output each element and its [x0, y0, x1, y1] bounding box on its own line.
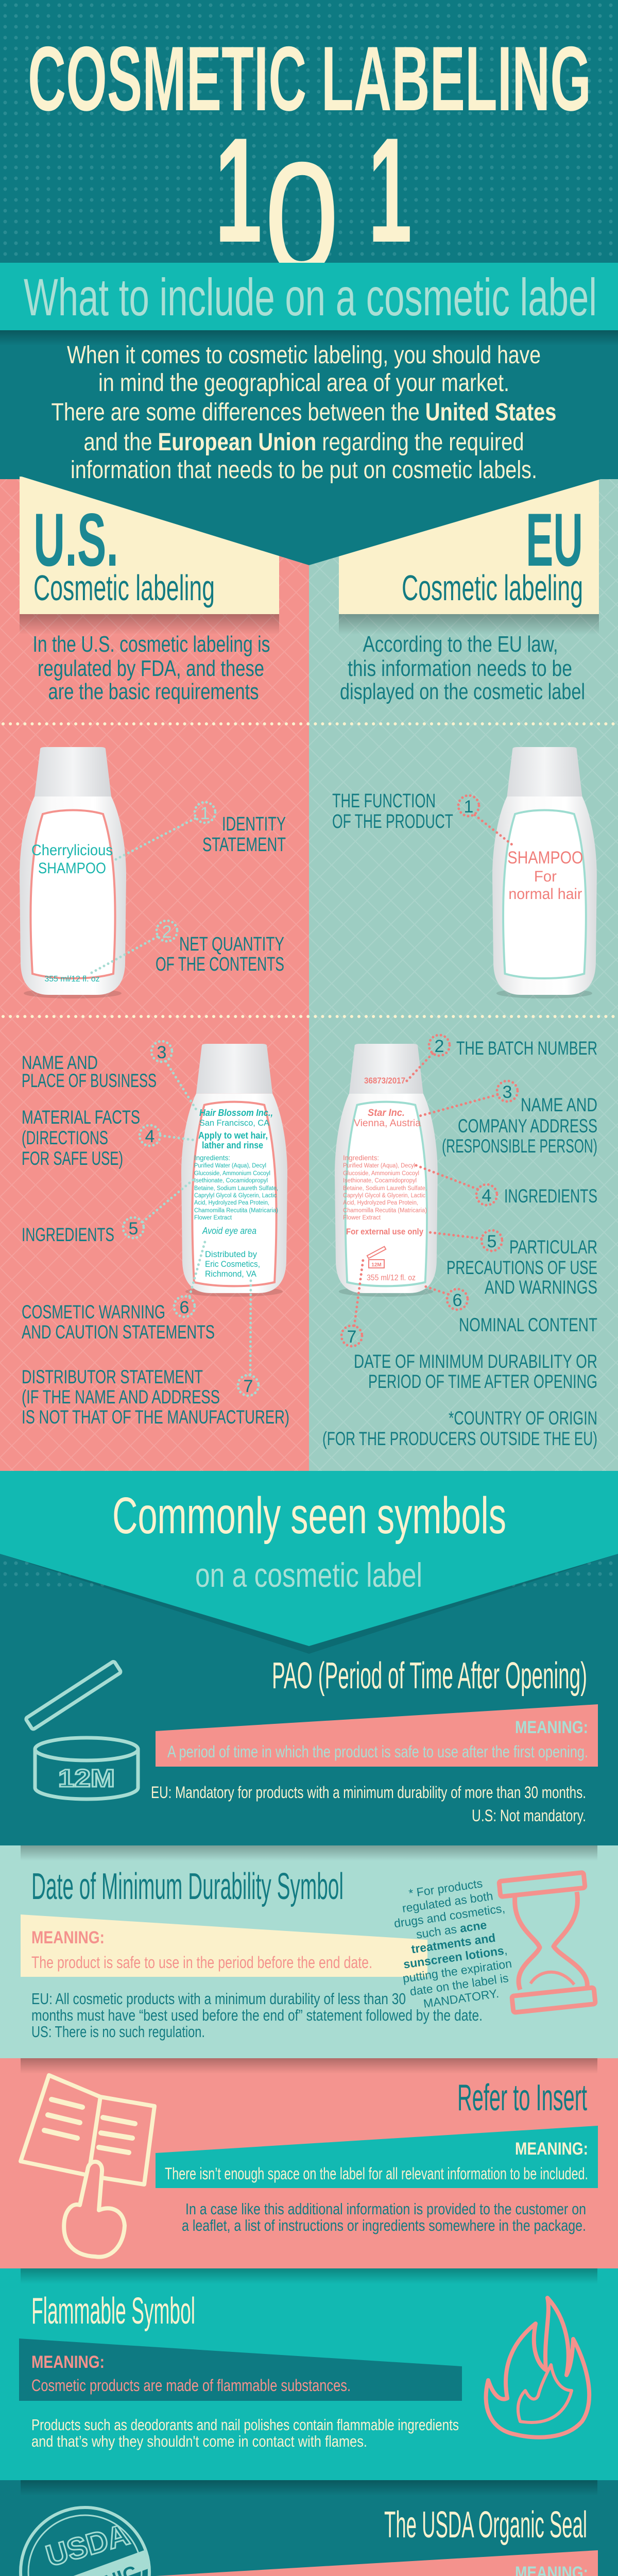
- text: US requirement labels: (IF THE NAME AND ADDRESS: [22, 1386, 220, 1408]
- callout numbers: US: 5: [129, 1219, 138, 1239]
- text: EU bottle label content: Isethionate, Cocamidopropyl: [343, 1178, 417, 1184]
- text: US bottle label content: Chamomilla Recutita (Matricaria): [194, 1208, 278, 1214]
- text: EU bottle label content: 12M: [371, 1262, 382, 1268]
- callout numbers: EU: 3: [503, 1082, 512, 1102]
- icon: USDA organic seal: [21, 2507, 149, 2576]
- text: US description: In the U.S. cosmetic labeling is: [33, 632, 270, 657]
- callout: note on drugs and cosmetics: date on the label is: [409, 1971, 509, 1998]
- text: flammable explanation: [31, 2416, 459, 2450]
- text: US requirement labels: MATERIAL FACTS: [22, 1107, 140, 1128]
- text: US bottle label content: Apply to wet hair,: [198, 1130, 268, 1141]
- callout: PAO meaning banner: [156, 1704, 598, 1767]
- bottle: EU shampoo for normal hair: SHAMPOO: [507, 849, 583, 868]
- callout: date meaning banner: The product is safe to use in the period before the end date.: [31, 1953, 372, 1972]
- icon: book with pointing hand: [21, 2075, 154, 2257]
- callout numbers: EU: 7: [347, 1327, 356, 1347]
- callout: refer meaning banner: [156, 2126, 598, 2188]
- callout: date meaning banner: MEANING:: [31, 1928, 105, 1947]
- icon: USDA organic seal: USDA: [42, 2518, 133, 2573]
- text: US bottle label content: Acid, Hydrolyzed Pea Protein,: [194, 1200, 269, 1206]
- text: PAO regulation: [151, 1783, 586, 1825]
- bottle: EU full label: [335, 1044, 438, 1297]
- text: EU description: [340, 632, 585, 704]
- callout: flammable meaning banner: [19, 2338, 462, 2401]
- text: EU requirement labels: [322, 1038, 597, 1449]
- bottle: EU shampoo for normal hair: For: [534, 868, 557, 885]
- callout numbers: US: 7: [244, 1377, 253, 1396]
- text: US requirement labels: [22, 1052, 289, 1428]
- text: date regulation: US: There is no such regulation.: [31, 2023, 205, 2041]
- text: US bottle label content: Avoid eye area: [202, 1226, 256, 1236]
- callout: USDA meaning banner: [156, 2550, 598, 2576]
- text: US requirement labels: INGREDIENTS: [22, 1224, 114, 1245]
- text: US description: regulated by FDA, and these: [38, 656, 264, 681]
- panel: date of minimum durability: [0, 1845, 618, 2058]
- text: flammable explanation: and that’s why they shouldn't come in contact with flames.: [31, 2432, 367, 2450]
- text: US description: are the basic requirements: [48, 679, 259, 704]
- text: US requirement labels: IS NOT THAT OF THE MANUFACTURER): [22, 1406, 289, 1428]
- title number 101: [215, 86, 412, 316]
- heading: flammable: Flammable Symbol: [31, 2291, 195, 2332]
- text: refer explanation: [182, 2200, 586, 2234]
- panel: PAO background: [0, 1471, 618, 1845]
- heading: date of minimum durability: Date of Minimum Durability Symbol: [31, 1866, 344, 1907]
- text: US requirement labels: PLACE OF BUSINESS: [22, 1070, 157, 1091]
- callout 1: function of the product: THE FUNCTION: [332, 790, 436, 812]
- text: US bottle label content: Flower Extract: [194, 1215, 232, 1221]
- icon: hourglass: [499, 1872, 595, 2012]
- callouts: EU requirements 2-7: [341, 1035, 518, 1346]
- bottle: US full label: [181, 1044, 287, 1297]
- heading: commonly seen symbols band: [0, 1471, 618, 1654]
- text: US requirement labels: NAME AND: [22, 1052, 98, 1073]
- text: US requirement labels: AND CAUTION STATEMENTS: [22, 1321, 215, 1343]
- text: EU bottle label content: Chamomilla Recutita (Matricaria): [343, 1208, 427, 1214]
- text: date regulation: months must have “best used before the end of” statement followed by the date.: [31, 2006, 483, 2024]
- callout: refer meaning banner: MEANING:: [515, 2139, 588, 2159]
- callout 1: identity statement: STATEMENT: [202, 834, 286, 856]
- text: EU bottle label content: [343, 1076, 427, 1282]
- text: EU requirement labels: NAME AND: [521, 1094, 597, 1115]
- callout: flammable meaning banner: Cosmetic products are made of flammable substances.: [31, 2376, 351, 2395]
- text: US bottle label content: Betaine, Sodium Laureth Sulfate,: [194, 1185, 278, 1192]
- text: US bottle label content: Distributed by: [205, 1249, 257, 1259]
- text: US bottle label content: Caprylyl Glycol & Glycerin, Lactic: [194, 1193, 277, 1199]
- intro text: [52, 342, 556, 484]
- text: EU bottle label content: Acid, Hydrolyzed Pea Protein,: [343, 1200, 418, 1206]
- icon: flame: [486, 2298, 589, 2437]
- text: flammable explanation: Products such as deodorants and nail polishes contain flammable ingredients: [31, 2416, 459, 2434]
- callout numbers: EU: 4: [482, 1186, 491, 1206]
- text: US bottle label content: Isethionate, Cocamidopropyl: [194, 1178, 268, 1184]
- intro text: There are some differences between the United States: [52, 399, 556, 426]
- icon: PAO open jar: [25, 1661, 138, 1799]
- callout: PAO meaning banner: MEANING:: [515, 1718, 588, 1737]
- bottle: US Cherrylicious shampoo: SHAMPOO: [38, 860, 106, 877]
- text: US bottle label content: Eric Cosmetics,: [205, 1259, 260, 1269]
- callout 1: identity statement: [116, 802, 286, 859]
- callout 2: net quantity: OF THE CONTENTS: [156, 954, 284, 975]
- heading: U.S. cosmetic labeling: Cosmetic labeling: [33, 568, 215, 608]
- callout: note on drugs and cosmetics: * For products: [408, 1876, 484, 1900]
- panel: USDA organic seal: [0, 2480, 618, 2576]
- bottle: US Cherrylicious shampoo: Cherrylicious: [31, 842, 113, 859]
- heading: U.S. cosmetic labeling: U.S.: [33, 498, 118, 582]
- callouts: US requirements 3-7: [123, 1041, 259, 1396]
- text: EU description: this information needs to be: [348, 656, 572, 681]
- text: EU bottle label content: Glucoside, Ammonium Cocoyl: [343, 1171, 419, 1177]
- title number 101: o: [264, 86, 340, 316]
- callout: date meaning banner: [21, 1914, 427, 1977]
- callout: note on drugs and cosmetics: MANDATORY.: [422, 1987, 500, 2010]
- callout numbers: EU: 5: [487, 1232, 496, 1251]
- callout 1: identity statement: IDENTITY: [222, 814, 286, 835]
- text: US requirement labels: FOR SAFE USE): [22, 1148, 123, 1169]
- heading: commonly seen symbols band: on a cosmetic label: [195, 1556, 422, 1594]
- callout 1: function of the product: 1: [464, 797, 473, 817]
- callout: note on drugs and cosmetics: treatments and: [410, 1931, 496, 1956]
- text: US requirement labels: (DIRECTIONS: [22, 1127, 108, 1148]
- panel: flammable symbol: [0, 2268, 618, 2480]
- callout: note on drugs and cosmetics: putting the expiration: [402, 1957, 512, 1985]
- text: US bottle label content: lather and rinse: [202, 1140, 263, 1150]
- callout: note on drugs and cosmetics: [389, 1874, 518, 2013]
- callout 1: function of the product: OF THE PRODUCT: [332, 811, 453, 833]
- callout numbers: EU: 2: [435, 1037, 444, 1056]
- text: EU description: According to the EU law,: [363, 632, 558, 657]
- text: US bottle label content: Purified Water (Aqua), Decyl: [194, 1163, 266, 1169]
- bottle: US Cherrylicious shampoo: 355 ml/12 fl. oz: [44, 975, 100, 984]
- text: US bottle label content: Richmond, VA: [205, 1269, 257, 1279]
- heading: EU cosmetic labeling: [402, 498, 583, 608]
- text: date regulation: EU: All cosmetic products with a minimum durability of less than 30: [31, 1990, 406, 2008]
- text: PAO regulation: U.S: Not mandatory.: [472, 1806, 586, 1825]
- text: EU bottle label content: Vienna, Austria: [354, 1118, 421, 1129]
- title number 101: 1: [368, 107, 412, 274]
- callout: note on drugs and cosmetics: regulated as both: [401, 1889, 494, 1915]
- bottle: US Cherrylicious shampoo: [20, 747, 126, 998]
- text: US bottle label content: [194, 1108, 278, 1279]
- callout 2: net quantity: NET QUANTITY: [179, 934, 284, 955]
- callout 2: net quantity: [92, 921, 284, 975]
- heading: U.S. cosmetic labeling: [33, 498, 215, 608]
- text: EU bottle label content: Purified Water (Aqua), Decyl: [343, 1163, 415, 1169]
- text: EU bottle label content: For external use only: [346, 1227, 423, 1236]
- callout: flammable meaning banner: MEANING:: [31, 2352, 105, 2372]
- text: EU bottle label content: Star Inc.: [368, 1108, 405, 1118]
- text: EU bottle label content: Betaine, Sodium Laureth Sulfate,: [343, 1185, 427, 1192]
- panel: US and EU comparison background: [0, 464, 618, 1471]
- text: US bottle label content: Glucoside, Ammonium Cocoyl: [194, 1171, 270, 1177]
- callout numbers: US: 3: [157, 1043, 166, 1062]
- bottle: EU shampoo for normal hair: [492, 747, 597, 998]
- text: US requirement labels: DISTRIBUTOR STATEMENT: [22, 1366, 203, 1387]
- callout: note on drugs and cosmetics: sunscreen lotions,: [403, 1943, 508, 1971]
- callout 2: net quantity: 2: [162, 922, 171, 942]
- intro text: in mind the geographical area of your market.: [98, 369, 509, 397]
- callout numbers: US: 4: [145, 1127, 154, 1146]
- text: date regulation: [31, 1990, 483, 2041]
- callout numbers: EU: [347, 1037, 512, 1347]
- callout numbers: US: [129, 1043, 253, 1396]
- subtitle band: [0, 263, 618, 346]
- intro text: and the European Union regarding the required: [83, 429, 524, 456]
- callout: note on drugs and cosmetics: such as acne: [415, 1918, 488, 1941]
- header background: [0, 0, 618, 479]
- text: EU bottle label content: 36873/2017: [364, 1076, 405, 1086]
- callout: note on drugs and cosmetics: drugs and cosmetics,: [393, 1902, 506, 1930]
- text: US bottle label content: San Francisco, CA: [199, 1118, 270, 1128]
- panel: refer to insert: [0, 2058, 618, 2268]
- text: US bottle label content: Ingredients:: [194, 1154, 230, 1162]
- text: EU bottle label content: Caprylyl Glycol & Glycerin, Lactic: [343, 1193, 425, 1199]
- callout 1: identity statement: 1: [200, 804, 210, 823]
- icon: PAO open jar: 12M: [58, 1765, 115, 1792]
- text: US description: [33, 632, 270, 704]
- text: US requirement labels: COSMETIC WARNING: [22, 1301, 165, 1323]
- callout numbers: US: 6: [180, 1298, 189, 1317]
- callout 1: function of the product: [332, 790, 512, 845]
- bottle: EU shampoo for normal hair: normal hair: [508, 886, 582, 903]
- text: EU bottle label content: Ingredients:: [343, 1154, 379, 1162]
- text: EU bottle label content: 355 ml/12 fl. oz: [367, 1274, 416, 1282]
- callout numbers: EU: 6: [453, 1291, 462, 1310]
- text: US bottle label content: Hair Blossom Inc.,: [199, 1108, 273, 1118]
- title number 101: 1: [215, 107, 262, 274]
- text: EU bottle label content: Flower Extract: [343, 1215, 381, 1221]
